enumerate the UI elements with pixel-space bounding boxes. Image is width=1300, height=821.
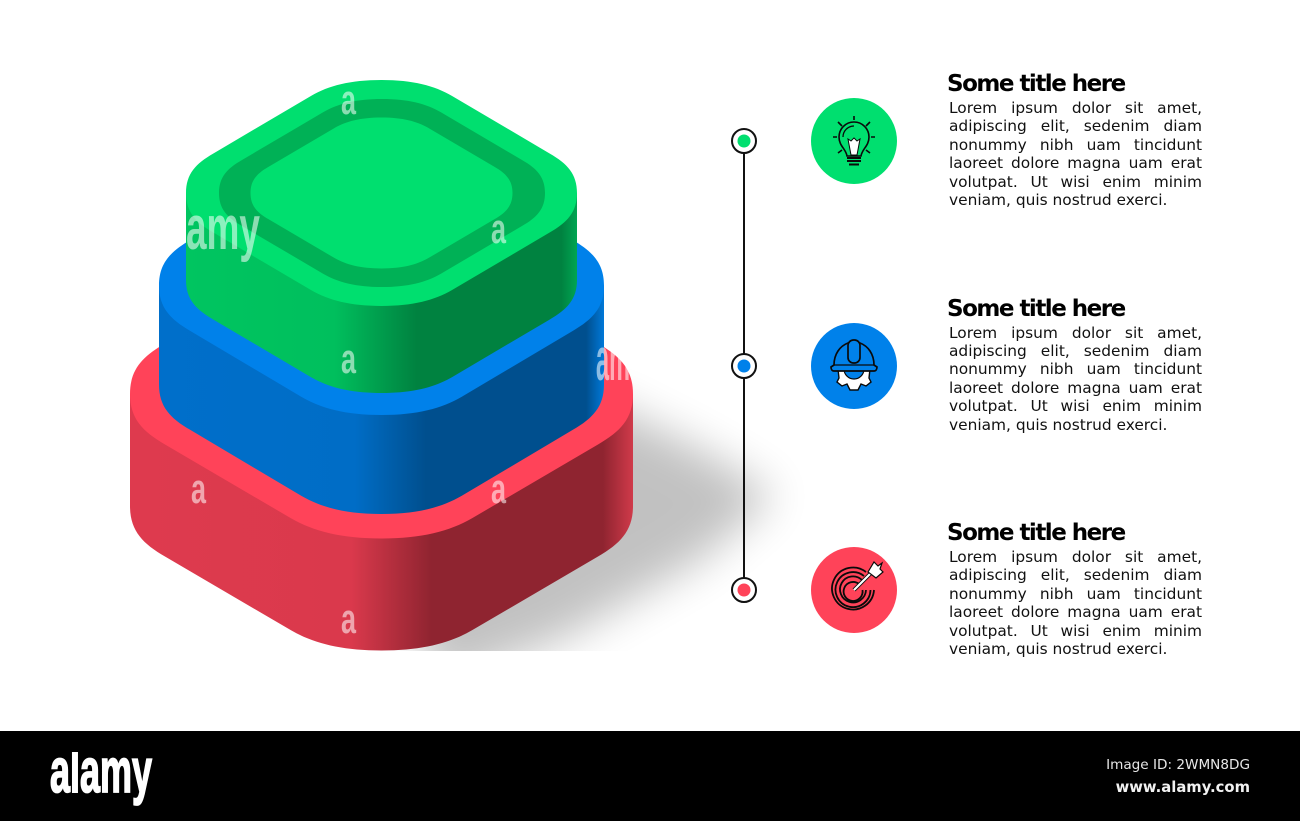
website: www.alamy.com	[1116, 779, 1250, 796]
body 1: laoreet dolore magna uam erat	[949, 154, 1202, 172]
body 2: Lorem ipsum dolor sit amet,	[949, 324, 1202, 342]
body 3: adipiscing elit, sedenim diam	[949, 566, 1202, 584]
body 3: laoreet dolore magna uam erat	[949, 603, 1202, 621]
title 3: Some title here	[947, 520, 1125, 546]
body 2: laoreet dolore magna uam erat	[949, 379, 1202, 397]
image id: Image ID: 2WMN8DG	[1106, 757, 1250, 773]
icon: target with dart	[811, 547, 897, 633]
watermark letters: a	[341, 595, 356, 642]
body 3: veniam, quis nostrud exerci.	[949, 640, 1167, 658]
timeline node: blue	[732, 354, 756, 378]
body 1: veniam, quis nostrud exerci.	[949, 191, 1167, 209]
watermark letters: a	[491, 465, 506, 512]
body 3	[949, 548, 1202, 658]
footer bar	[0, 731, 1300, 821]
body 1: nonummy nibh uam tincidunt	[949, 136, 1202, 154]
body 1: volutpat. Ut wisi enim minim	[949, 173, 1202, 191]
watermark letters: a	[341, 76, 356, 123]
text block 2	[947, 296, 1202, 434]
watermark letters: a	[491, 205, 506, 252]
text block 3	[947, 520, 1202, 658]
3D layered stack illustration: am	[596, 326, 630, 393]
body 3: Lorem ipsum dolor sit amet,	[949, 548, 1202, 566]
body 2: adipiscing elit, sedenim diam	[949, 342, 1202, 360]
body 2	[949, 324, 1202, 434]
icon: light bulb	[811, 98, 897, 184]
body 1	[949, 99, 1202, 209]
body 1: Lorem ipsum dolor sit amet,	[949, 99, 1202, 117]
body 3: nonummy nibh uam tincidunt	[949, 585, 1202, 603]
blue middle layer	[159, 156, 604, 514]
title 1: Some title here	[947, 71, 1125, 97]
timeline node: green	[732, 129, 756, 153]
timeline	[732, 129, 756, 602]
watermark letters	[186, 76, 630, 642]
icon: helmet with gear	[811, 323, 897, 409]
watermark letters: amy	[186, 194, 260, 263]
title 2: Some title here	[947, 296, 1125, 322]
green top layer	[186, 80, 577, 393]
timeline node: red	[732, 578, 756, 602]
body 1: adipiscing elit, sedenim diam	[949, 117, 1202, 135]
body 2: veniam, quis nostrud exerci.	[949, 416, 1167, 434]
body 2: volutpat. Ut wisi enim minim	[949, 397, 1202, 415]
text block 1	[947, 71, 1202, 209]
watermark letters: a	[191, 465, 206, 512]
body 2: nonummy nibh uam tincidunt	[949, 360, 1202, 378]
red base layer	[130, 250, 633, 650]
body 3: volutpat. Ut wisi enim minim	[949, 622, 1202, 640]
watermark letters: a	[341, 335, 356, 382]
3D layered stack illustration	[130, 80, 897, 651]
cast shadow	[402, 392, 780, 651]
